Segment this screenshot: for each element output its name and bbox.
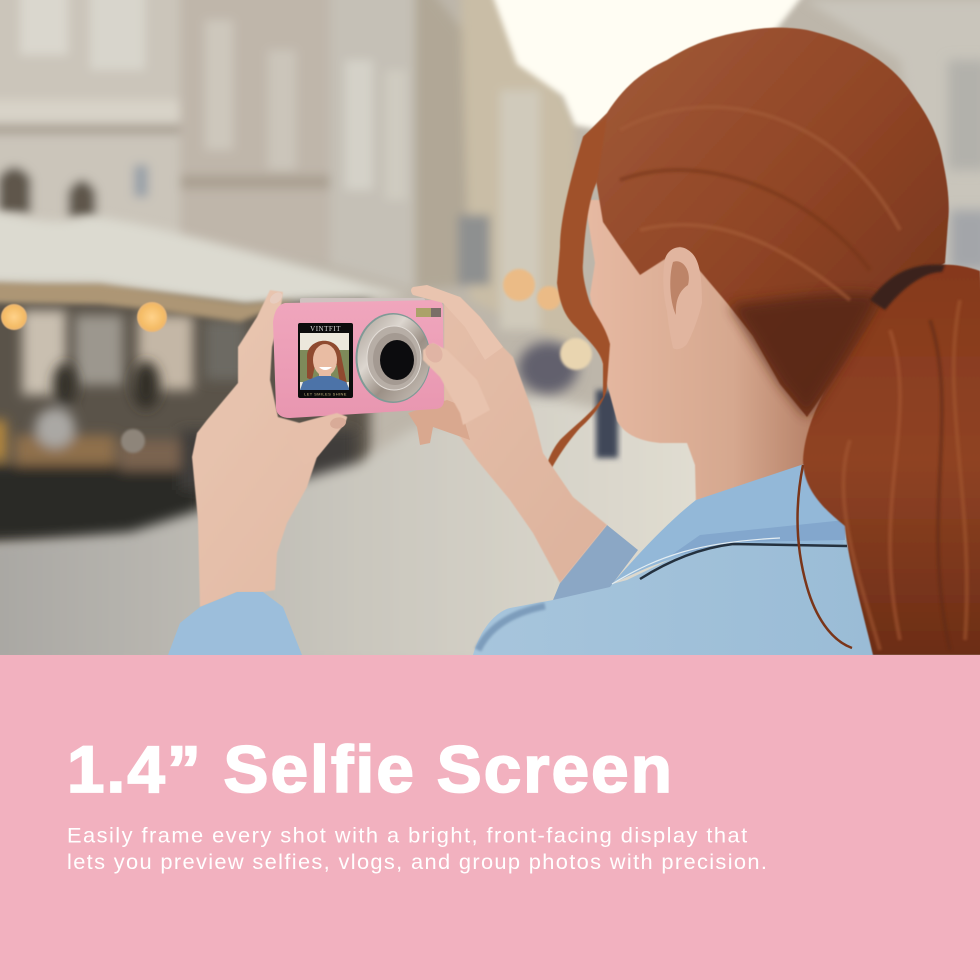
ear [663,247,702,349]
right thumb [423,343,490,425]
right forearm and hand [444,297,607,583]
sky [487,0,815,130]
description text: Easily frame every shot with a bright, front-facing display that [67,824,747,847]
hair main [583,28,949,417]
jacket [473,463,880,655]
pavement [0,395,720,665]
flash [416,308,431,317]
left wrist and hand [192,290,347,607]
building right [816,0,980,270]
photo: woman photographing with a pink camera on a city street [0,0,980,665]
pink camera [273,298,444,418]
camera body [273,300,444,418]
selfie portrait [300,333,350,390]
left index fingertip [268,290,284,306]
blurred street background [0,0,980,665]
screen brand text: VINTFIT [310,325,341,333]
hair strands [620,107,967,650]
bokeh lights [1,269,592,453]
lens assembly [356,313,430,403]
jacket body [473,525,880,655]
left cuff [168,592,302,655]
right cuff [553,525,638,600]
left thumbnail [329,416,347,430]
right index finger [411,285,503,360]
collar [612,463,847,584]
shadow at nape [730,294,880,417]
fingers behind the camera [408,400,470,445]
cafe seating [0,361,355,540]
title: 1.4” Selfie Screen [67,734,672,807]
wispy strand over the jacket [797,465,852,648]
cafe interior under the awning [0,295,370,545]
fingers over the camera [268,285,503,465]
hair lock by the cheek [548,118,611,468]
ponytail [803,265,980,655]
panel: pink caption band [0,655,980,980]
screen caption: LET SMILES SHINE [304,392,347,396]
description text: lets you preview selfies, vlogs, and group photos with precision. [67,850,767,874]
cafe awning [0,208,408,306]
right thumbnail [422,340,446,366]
camera top buttons [300,298,425,303]
left thumb [285,413,347,465]
building facades [0,0,580,350]
neck and face [587,200,830,505]
description text [67,824,767,874]
hair tie [870,265,945,310]
shoulder seam [478,606,545,650]
selfie screen [298,323,353,398]
distant car and figures [518,342,578,394]
